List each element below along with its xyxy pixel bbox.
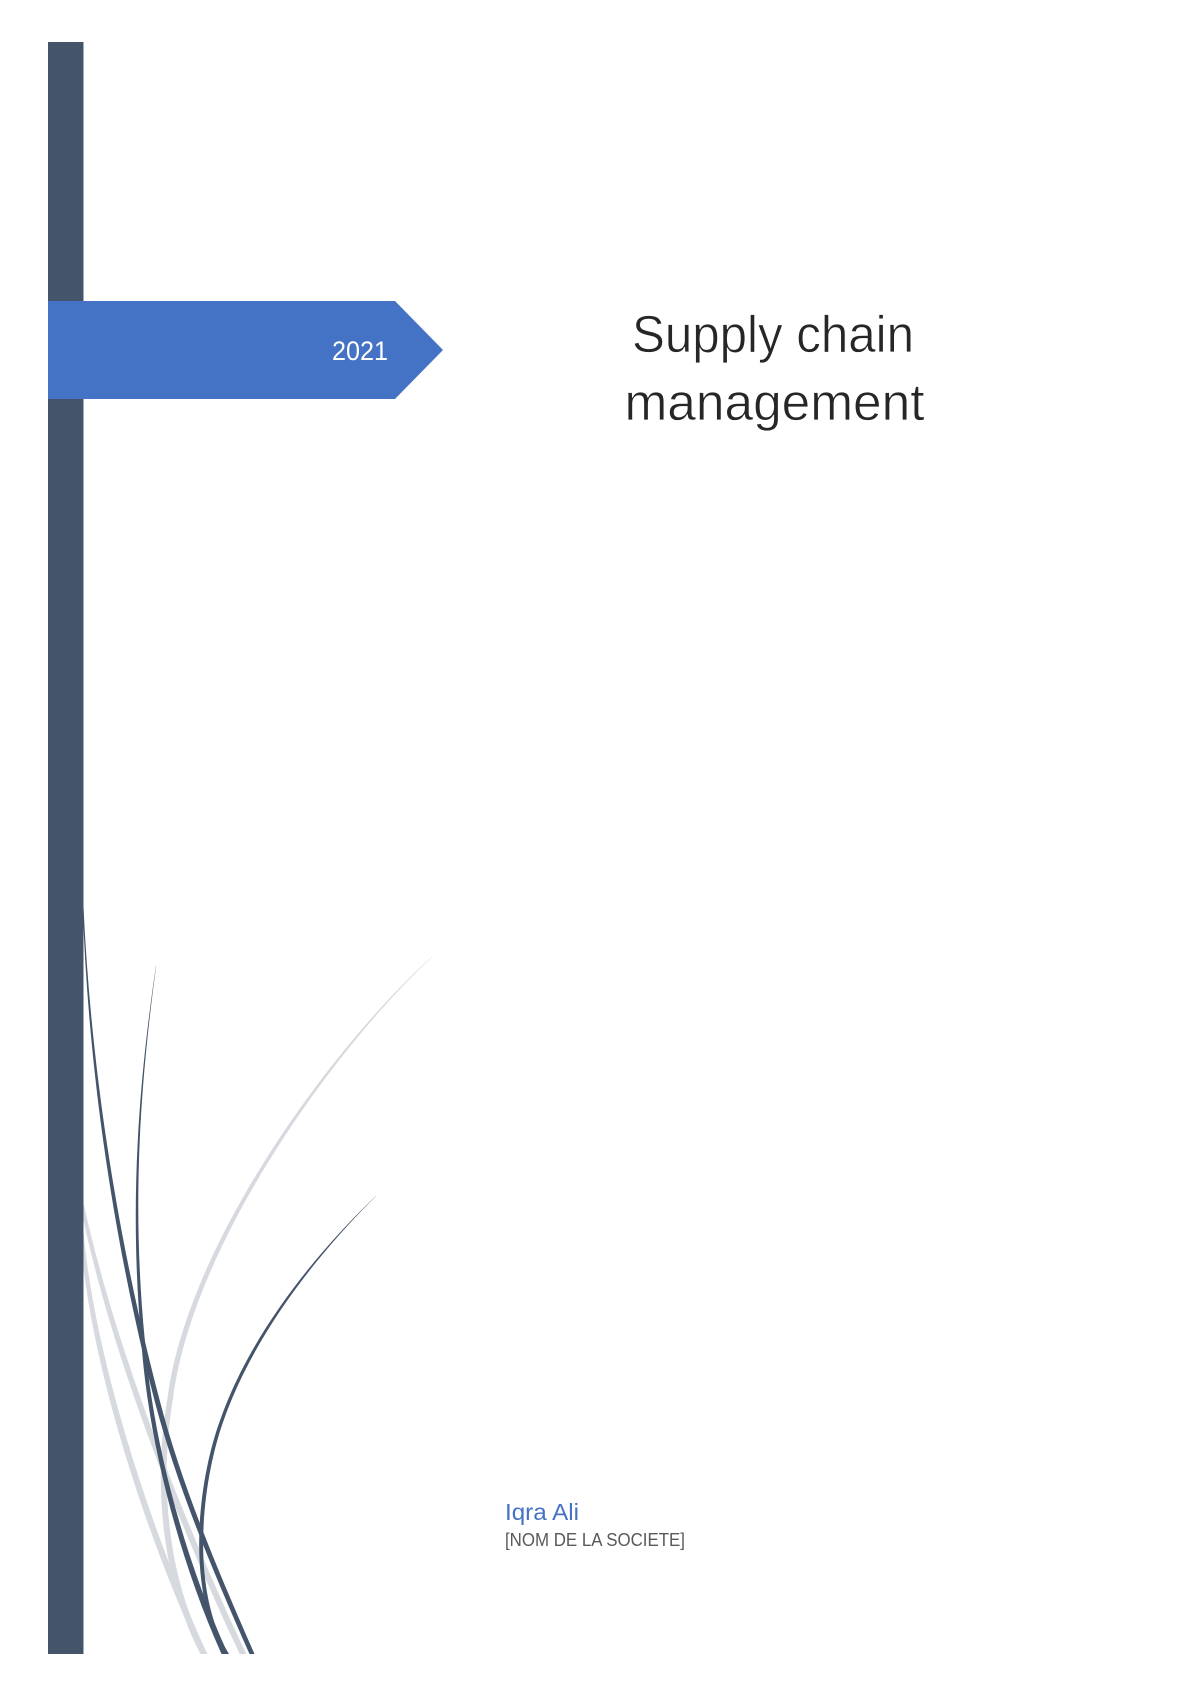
title line 2: management [624,374,925,432]
title [624,306,925,432]
light curve: tall right sweep [161,957,432,1654]
dark curve: thin upright [136,966,228,1654]
year label: 2021 [332,336,388,366]
dark curve: right sweep [199,1196,376,1654]
vertical sidebar bar [48,42,84,1654]
author name: Iqra Ali [505,1499,579,1525]
dark curve: long from bar [83,905,254,1654]
light curve: from bar, upper [80,1203,246,1654]
company placeholder: [NOM DE LA SOCIETE] [505,1530,685,1550]
decorative wave curves [80,905,432,1654]
light curve: from bar, lower [80,1233,207,1654]
title line 1: Supply chain [632,306,914,364]
year banner arrow [48,301,443,399]
